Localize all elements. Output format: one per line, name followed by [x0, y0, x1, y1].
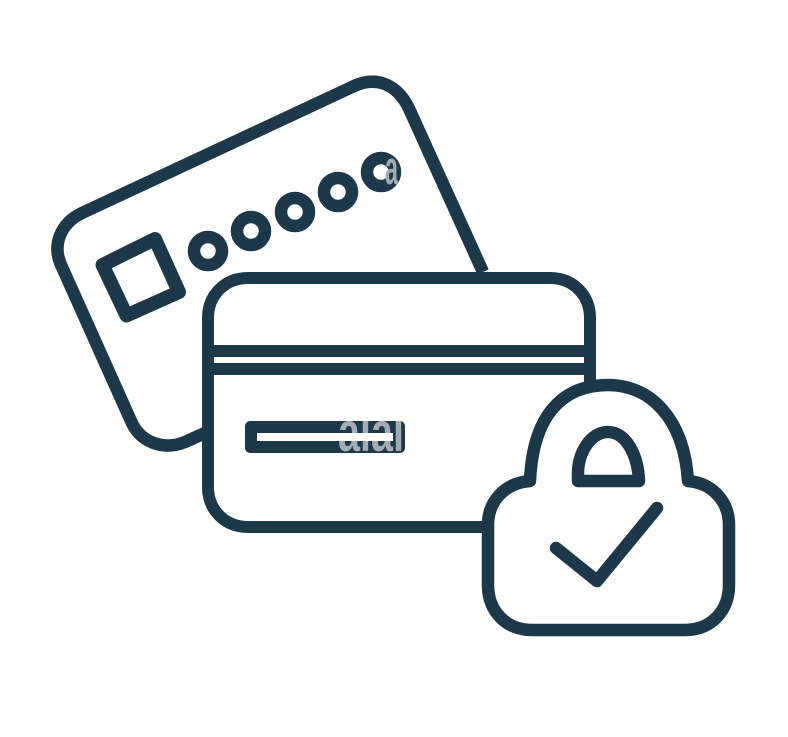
watermark fragment on last dot: a: [385, 141, 398, 194]
padlock keyhole arch: [578, 432, 639, 481]
padlock body: [488, 385, 729, 630]
front card outline: [208, 278, 590, 527]
front card: [208, 278, 590, 527]
watermark fragment on bar: alal: [338, 400, 404, 463]
padlock: [488, 385, 729, 630]
check mark: [556, 508, 657, 581]
icon: secure credit cards with padlock: [51, 75, 736, 636]
magnetic stripe: [208, 345, 590, 375]
signature bar: [245, 421, 405, 453]
back card chip: [102, 239, 179, 316]
back card, tilted: [57, 82, 483, 445]
back card dots: [194, 158, 395, 265]
back card outline: [57, 82, 483, 445]
